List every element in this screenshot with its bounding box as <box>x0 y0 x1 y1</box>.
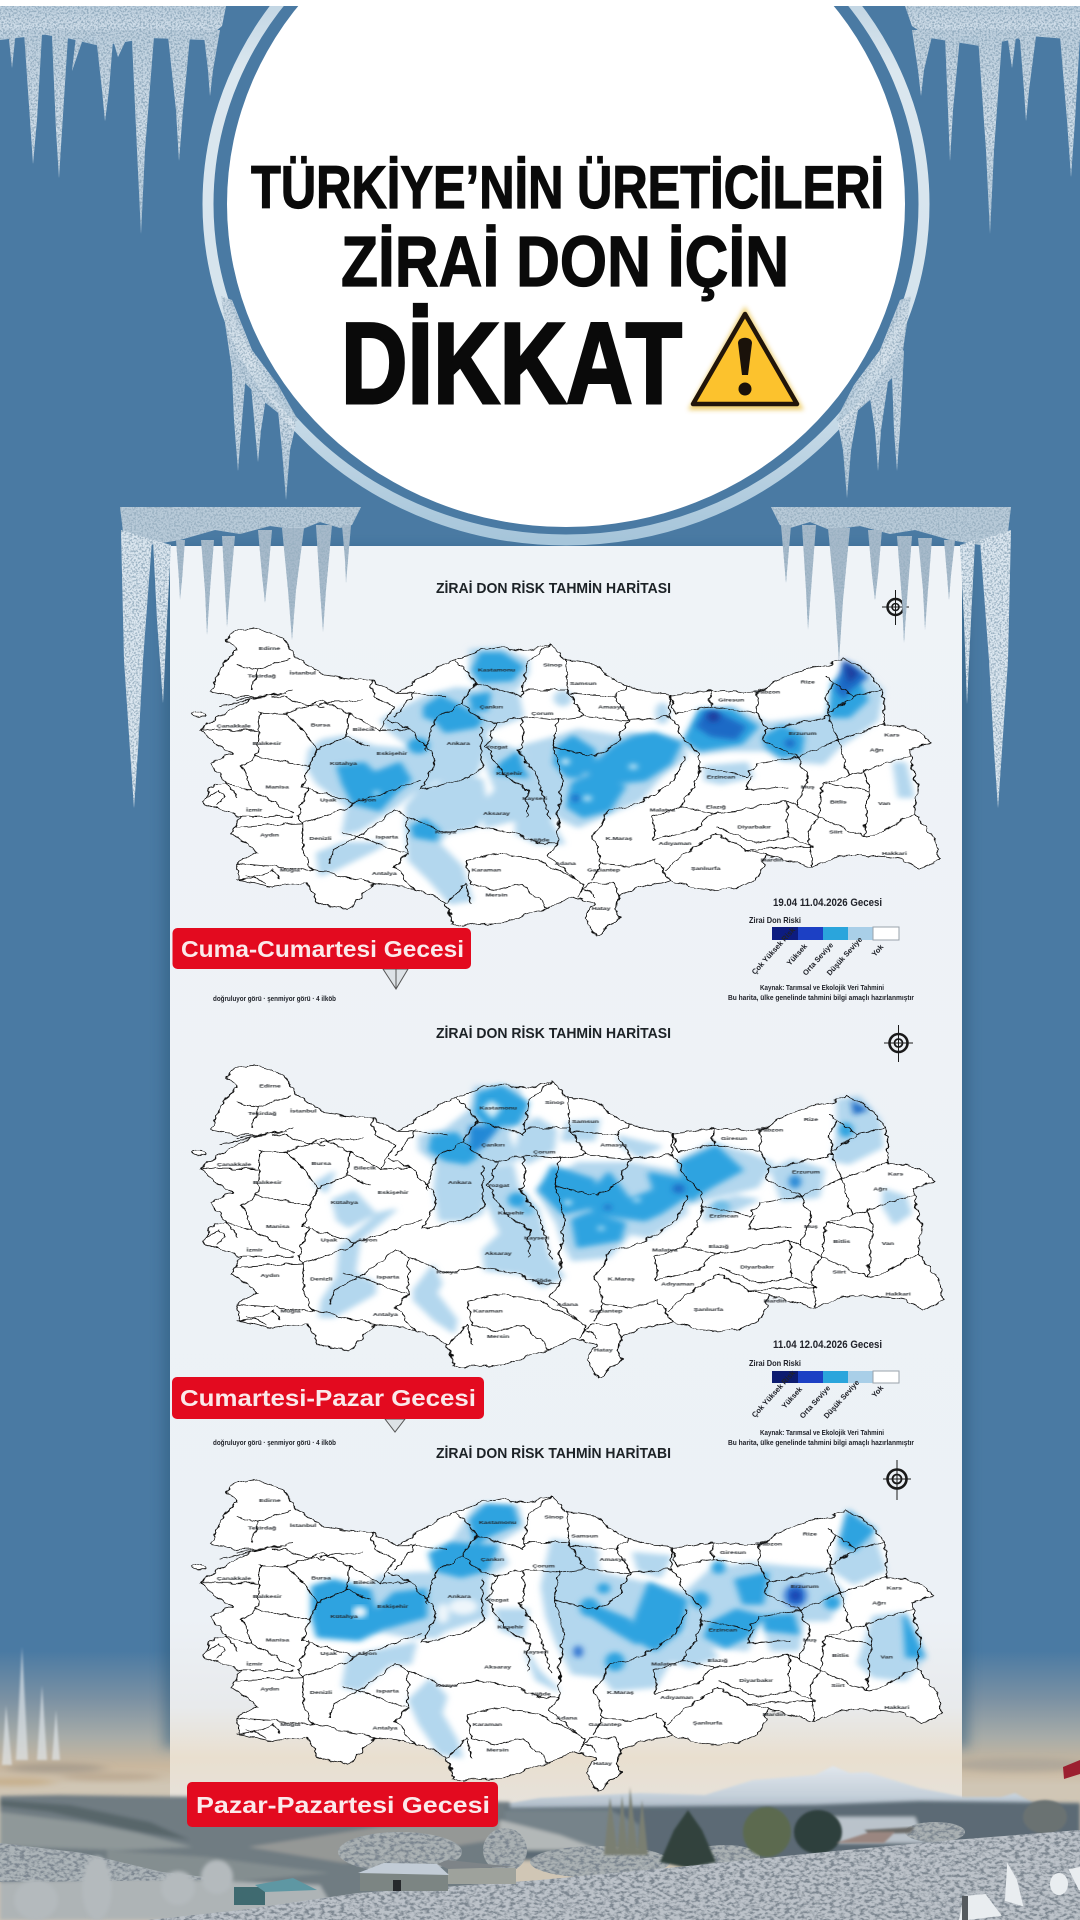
map 1 risk areas <box>308 648 912 903</box>
map 1 province names: Antalya <box>372 872 398 877</box>
map 1 province names: K.Maraş <box>606 837 632 842</box>
map 2 province names: Uşak <box>321 1238 338 1243</box>
panel: map sheet <box>163 546 969 1808</box>
map 1 province names: Siirt <box>829 830 843 835</box>
map 3 province names: Diyarbakır <box>739 1679 774 1684</box>
map 3 province names: Şanlıurfa <box>693 1721 723 1726</box>
map 1 province names: Çanakkale <box>217 724 252 729</box>
map 3 province names: Erzurum <box>791 1585 819 1589</box>
icon: warning triangle <box>688 306 804 410</box>
map 3 province names <box>217 1499 910 1766</box>
map 3 province names: Eskişehir <box>377 1605 409 1610</box>
map 2 province borders <box>192 1065 944 1379</box>
map 2 province names: Çanakkale <box>217 1163 252 1167</box>
map 2 province names: Konya <box>436 1270 458 1275</box>
farmhouse <box>358 1860 516 1891</box>
map 3 province names: Çorum <box>533 1565 555 1569</box>
map 1 province names: İzmir <box>246 808 263 813</box>
map 2 province names: Giresun <box>721 1137 748 1141</box>
map 3 province names: Adıyaman <box>660 1696 694 1701</box>
map 1 province names: Mersin <box>485 894 508 898</box>
map 1 province names <box>217 647 907 912</box>
legend 2: Düşük Seviye <box>822 1378 861 1420</box>
map 1 base <box>191 628 940 937</box>
legend 1: Çok Yüksek Risk <box>750 925 797 976</box>
map 2 province names: Niğde <box>532 1279 552 1284</box>
map 3 province names: Mardin <box>763 1713 786 1717</box>
map 3 province names: Konya <box>436 1684 458 1689</box>
map 1 province names: Giresun <box>718 699 745 703</box>
map 3 province names: Edirne <box>259 1499 281 1503</box>
map 3 province names: Giresun <box>720 1551 747 1556</box>
map 3 province names: Bilecik <box>353 1581 377 1585</box>
legend 2: Kaynak: Tarımsal ve Ekolojik Veri Tahmini <box>760 1428 884 1437</box>
map 3 province names: Afyon <box>357 1652 377 1657</box>
map 2 province names: Isparta <box>377 1276 400 1280</box>
panel: map 1 Cuma-Cumartesi <box>191 580 940 1003</box>
map 3 province names: Karaman <box>473 1723 503 1728</box>
map 3 province names: Niğde <box>532 1693 552 1697</box>
map 1 province names: Kayseri <box>522 797 548 802</box>
map 1 province names: Rize <box>801 680 816 685</box>
map 1 province names: Ankara <box>447 742 471 747</box>
map 3 province names: İstanbul <box>290 1523 317 1528</box>
map 2 province names: Amasya <box>600 1143 628 1148</box>
flag <box>1063 1760 1080 1779</box>
map 1 province names: Adıyaman <box>659 842 692 847</box>
map 3 province names: Denizli <box>310 1691 333 1696</box>
map 3 province names: Antalya <box>373 1726 398 1731</box>
map 1 province names: Kars <box>884 734 900 738</box>
frost trees <box>14 1856 233 1920</box>
map 1 province names: Çankırı <box>480 705 504 710</box>
map 1 province names: Hakkari <box>882 852 907 857</box>
map 1 province names: Uşak <box>320 799 337 803</box>
heading: title text <box>251 154 884 428</box>
map 3 province names: Manisa <box>266 1639 290 1643</box>
map 3 province names: Aksaray <box>484 1666 512 1670</box>
mountain <box>505 1766 1032 1815</box>
icon: circle right icicles <box>836 296 911 498</box>
map 3 risk areas <box>313 1505 925 1757</box>
map 3 province names: Hatay <box>593 1762 613 1766</box>
map 2 province names: Muğla <box>281 1309 301 1314</box>
label: Cumartesi-Pazar Gecesi: Cumartesi-Pazar Gecesi <box>180 1385 476 1411</box>
compass 2 <box>884 1025 913 1062</box>
map 1 province names: Hatay <box>592 907 611 912</box>
map 3 province names: Kütahya <box>330 1615 359 1620</box>
map 1 province names: Bitlis <box>830 800 847 805</box>
map title 1: ZİRAİ DON RİSK TAHMİN HARİTASI <box>436 580 671 597</box>
map 1 province names: Afyon <box>357 799 377 803</box>
map 1 province names: Karaman <box>472 869 502 873</box>
map 3 province borders <box>191 1480 943 1792</box>
map 3 province names: Isparta <box>376 1689 400 1694</box>
map 3 province names: Kırşehir <box>497 1625 524 1630</box>
legend 2: Yok <box>870 1383 886 1399</box>
map 1 province names: Muş <box>801 785 815 790</box>
compass 3 <box>883 1460 911 1500</box>
map 3 province names: Samsun <box>571 1534 599 1539</box>
map 1 province names: Samsun <box>570 682 597 687</box>
map 1 province names: Yozgat <box>486 745 508 750</box>
map 1 province names: Diyarbakır <box>737 825 772 830</box>
map 1 province names: Şanlıurfa <box>691 867 721 872</box>
map 1 province names: Edirne <box>259 647 281 652</box>
map 3 province names: Muğla <box>280 1723 301 1728</box>
map 3 province names: Tekirdağ <box>248 1526 277 1531</box>
map 3 province names: K.Maraş <box>607 1691 635 1696</box>
top white strip <box>0 0 1080 6</box>
map 1 province names: Erzurum <box>789 732 817 737</box>
map 2 province names: Adana <box>557 1303 579 1307</box>
map 3 province names: Çanakkale <box>217 1577 252 1582</box>
map 3 province names: Elazığ <box>708 1659 728 1664</box>
map 3 province names: Muş <box>803 1639 818 1643</box>
map 3 province names: Uşak <box>320 1652 338 1657</box>
map 2 province names: Çankırı <box>481 1143 505 1148</box>
map 3 province names: Kars <box>887 1586 903 1591</box>
map 1 province names: Trabzon <box>754 690 781 695</box>
map 2 province names: Şanlıurfa <box>694 1308 724 1312</box>
map 2 province names <box>217 1084 911 1353</box>
map 2 province names: Muş <box>804 1225 819 1229</box>
map 2 risk areas <box>315 1087 910 1332</box>
map 2 province names: Kırşehir <box>498 1211 525 1216</box>
map 3 province names: Van <box>881 1655 893 1660</box>
evergreen trees <box>660 1800 1067 1868</box>
legend 2: Orta Seviye <box>798 1384 832 1420</box>
map 1 province names: Gaziantep <box>587 869 621 873</box>
legend 1: Yok <box>870 942 886 958</box>
map 1 province names: Amasya <box>598 705 625 710</box>
foreground frosted field <box>148 1830 1080 1920</box>
icon: circle left icicles <box>221 296 298 500</box>
legend 1: Bu harita, ülke genelinde tahmini bilgi amaçlı hazırlanmıştır <box>728 993 914 1002</box>
map 1 province names: Kırşehir <box>496 772 523 777</box>
map 3 province names: Ankara <box>448 1595 472 1600</box>
map title 2: ZİRAİ DON RİSK TAHMİN HARİTASI <box>436 1025 671 1042</box>
map 3 province names: Balıkesir <box>253 1595 283 1600</box>
legend 1: Yüksek <box>785 941 810 967</box>
map 3 province names: Çankırı <box>481 1558 505 1562</box>
map 2 province names: Yozgat <box>487 1184 509 1189</box>
icon: panel left icicles <box>120 507 361 808</box>
map 2 province names: Kars <box>888 1172 904 1177</box>
map 3 province names: Trabzon <box>756 1543 783 1547</box>
map 3 province names: Aydın <box>260 1688 280 1692</box>
map 2 province names: Diyarbakır <box>740 1265 775 1270</box>
map 2 province names: Malatya <box>652 1248 678 1253</box>
map 1 province names: Aydın <box>260 834 279 838</box>
map 1 province names: Konya <box>435 830 457 835</box>
map 1 province names: Bursa <box>311 724 331 728</box>
label: Cuma-Cumartesi Gecesi <box>172 928 471 969</box>
map 2 province names: Tekirdağ <box>248 1112 277 1117</box>
map 2 province names: Mardin <box>764 1299 787 1304</box>
label: Cuma-Cumartesi Gecesi: Cuma-Cumartesi Gecesi <box>181 936 464 962</box>
map 1 province names: Malatya <box>650 809 676 813</box>
icon: top-left icicles <box>0 6 226 234</box>
map 3 province names: Ağrı <box>872 1602 886 1606</box>
map 2 province names: Trabzon <box>757 1128 784 1133</box>
map 1 province names: Kütahya <box>330 762 358 767</box>
map 2 province names: Van <box>882 1242 895 1246</box>
teal hut <box>234 1878 317 1905</box>
map 1 province names: Aksaray <box>483 812 511 817</box>
map 3 province names: Erzincan <box>708 1629 738 1633</box>
map 2 province names: Kütahya <box>331 1201 359 1206</box>
map 3 province names: Adana <box>556 1716 578 1721</box>
map 2 province names: Aksaray <box>485 1252 513 1257</box>
map 3 province names: Sinop <box>544 1516 564 1520</box>
distant red house <box>836 1827 915 1843</box>
map 2 province names: Kayseri <box>524 1237 550 1241</box>
map 2 province names: Mersin <box>487 1335 510 1340</box>
legend 1: 19.04 11.04.2026 Gecesi <box>773 897 882 909</box>
title circle <box>208 0 924 540</box>
panel: map 2 Cumartesi-Pazar <box>192 1025 944 1447</box>
map 2 province names: Bilecik <box>354 1166 377 1171</box>
legend 1: doğruluyor görü · şenmiyor görü · 4 ilköb <box>213 994 336 1003</box>
legend 2: Bu harita, ülke genelinde tahmini bilgi amaçlı hazırlanmıştır <box>728 1438 914 1447</box>
map 2 province names: Hakkari <box>886 1292 911 1297</box>
map 1 province names: Ağrı <box>870 749 884 753</box>
legend 2: doğruluyor görü · şenmiyor görü · 4 ilköb <box>213 1438 336 1447</box>
map 1 province names: Denizli <box>309 837 332 842</box>
map 2 province names: K.Maraş <box>608 1277 636 1282</box>
map 1 province names: Isparta <box>376 835 399 840</box>
map 1 province names: İstanbul <box>289 671 316 676</box>
map 2 province names: Edirne <box>259 1084 282 1089</box>
map 3 province names: Bursa <box>311 1576 332 1581</box>
legend 1 <box>213 897 914 1003</box>
map 1 province names: Sinop <box>543 664 563 668</box>
illustration: winter landscape <box>0 1760 1080 1920</box>
map 3 province names: Amasya <box>600 1558 627 1562</box>
map 3 province names: Gaziantep <box>589 1723 622 1728</box>
label: Cumartesi-Pazar Gecesi <box>172 1377 484 1419</box>
map 2 province names: İstanbul <box>290 1108 317 1114</box>
map 1 province names: Niğde <box>530 839 550 843</box>
map 2 province names: Gaziantep <box>589 1309 623 1314</box>
map 1 province names: Muğla <box>280 869 301 873</box>
map 3 province names: Yozgat <box>487 1598 509 1603</box>
map 1 province names: Tekirdağ <box>248 674 276 679</box>
heading: title text: DİKKAT <box>341 300 682 428</box>
map 2 province names: Afyon <box>358 1238 378 1243</box>
legend 1: Orta Seviye <box>801 941 835 977</box>
legend 2: Yüksek <box>780 1384 805 1410</box>
map 2 province names: Manisa <box>266 1225 290 1229</box>
map 3 province names: Mersin <box>486 1748 509 1753</box>
legend 1: Zirai Don Riski <box>749 915 801 925</box>
icon: top-right icicles <box>905 6 1080 234</box>
map 3 province names: Malatya <box>651 1662 678 1667</box>
map 1 province names: Bilecik <box>353 728 376 733</box>
map 2 province names: Ağrı <box>873 1187 888 1192</box>
legend 2: Zirai Don Riski <box>749 1358 801 1368</box>
poplars <box>604 1787 648 1855</box>
map 2 province names: Eskişehir <box>378 1191 409 1196</box>
map 2 province names: Ankara <box>448 1181 472 1185</box>
map 1 province names: Elazığ <box>706 805 726 810</box>
map 2 province names: Karaman <box>473 1309 503 1314</box>
map 2 province names: Erzincan <box>709 1215 739 1219</box>
map 2 province names: Samsun <box>572 1120 599 1124</box>
label: Pazar-Pazartesi Gecesi <box>187 1782 498 1827</box>
map 3 province names: Siirt <box>831 1684 845 1689</box>
map 1 province names: Eskişehir <box>377 752 408 757</box>
sunset clouds <box>0 1758 1080 1786</box>
map 2 province names: Elazığ <box>709 1245 729 1250</box>
map 1 province names: Balıkesir <box>253 742 282 747</box>
map title 3: ZİRAİ DON RİSK TAHMİN HARİTABI <box>436 1445 671 1462</box>
map 3 province names: İzmir <box>246 1661 263 1667</box>
map 2 province names: Antalya <box>373 1313 399 1317</box>
map 2 province names: Rize <box>804 1118 819 1123</box>
map 2 base <box>192 1065 944 1379</box>
panel: map 3 Pazar-Pazartesi <box>191 1445 943 1792</box>
heading: title text: ZİRAİ DON İÇİN <box>341 223 789 302</box>
map 1 province names: Erzincan <box>707 775 736 780</box>
map 3 province names: Bitlis <box>832 1654 850 1658</box>
compass 1 <box>882 590 909 625</box>
map 1 province names: Manisa <box>266 785 290 790</box>
map 1 province borders <box>191 628 940 937</box>
north arrow 2 <box>385 1419 405 1432</box>
map 2 province names: Erzurum <box>792 1171 820 1175</box>
map 2 province names: Bursa <box>311 1162 332 1167</box>
map 1 province names: Kastamonu <box>478 669 516 673</box>
map 2 province names: Hatay <box>594 1348 614 1353</box>
map 1 province names: Mardin <box>761 859 784 863</box>
map 2 province names: Siirt <box>832 1270 846 1275</box>
legend 2: 11.04 12.04.2026 Gecesi <box>773 1339 882 1351</box>
label: Pazar-Pazartesi Gecesi: Pazar-Pazartesi Gecesi <box>196 1792 490 1818</box>
map 2 province names: İzmir <box>247 1248 264 1253</box>
map 3 province names: Kastamonu <box>479 1521 517 1525</box>
map 1 province names: Çorum <box>531 712 554 717</box>
frost bushes mid <box>338 1822 965 1878</box>
icon: panel right icicles <box>771 507 1011 808</box>
map 3 base <box>191 1480 943 1792</box>
map 1 province names: Adana <box>555 862 577 867</box>
map 3 province names: Hakkari <box>884 1706 910 1711</box>
map 2 province names: Adıyaman <box>661 1282 695 1287</box>
frost plant <box>960 1866 1080 1920</box>
icon: distant frost spires <box>2 1647 60 1765</box>
legend 2 <box>213 1339 914 1447</box>
map 2 province names: Aydın <box>261 1274 280 1279</box>
map 2 province names: Çorum <box>533 1150 555 1155</box>
legend 1: Düşük Seviye <box>825 935 864 977</box>
heading: title text: TÜRKİYE’NİN ÜRETİCİLERİ <box>251 154 884 221</box>
map 2 province names: Denizli <box>310 1277 333 1282</box>
map 3 province names: Kayseri <box>524 1650 549 1655</box>
map 2 province names: Bitlis <box>833 1240 851 1245</box>
map 1 province names: Van <box>878 802 891 807</box>
map 3 province names: Rize <box>803 1532 818 1537</box>
legend 2: Çok Yüksek Risk <box>750 1368 797 1419</box>
map 2 province names: Sinop <box>545 1101 565 1106</box>
map 2 province names: Kastamonu <box>479 1106 518 1111</box>
north arrow 1 <box>383 969 408 989</box>
legend 1: Kaynak: Tarımsal ve Ekolojik Veri Tahmini <box>760 983 884 992</box>
map 2 province names: Balıkesir <box>253 1181 283 1185</box>
